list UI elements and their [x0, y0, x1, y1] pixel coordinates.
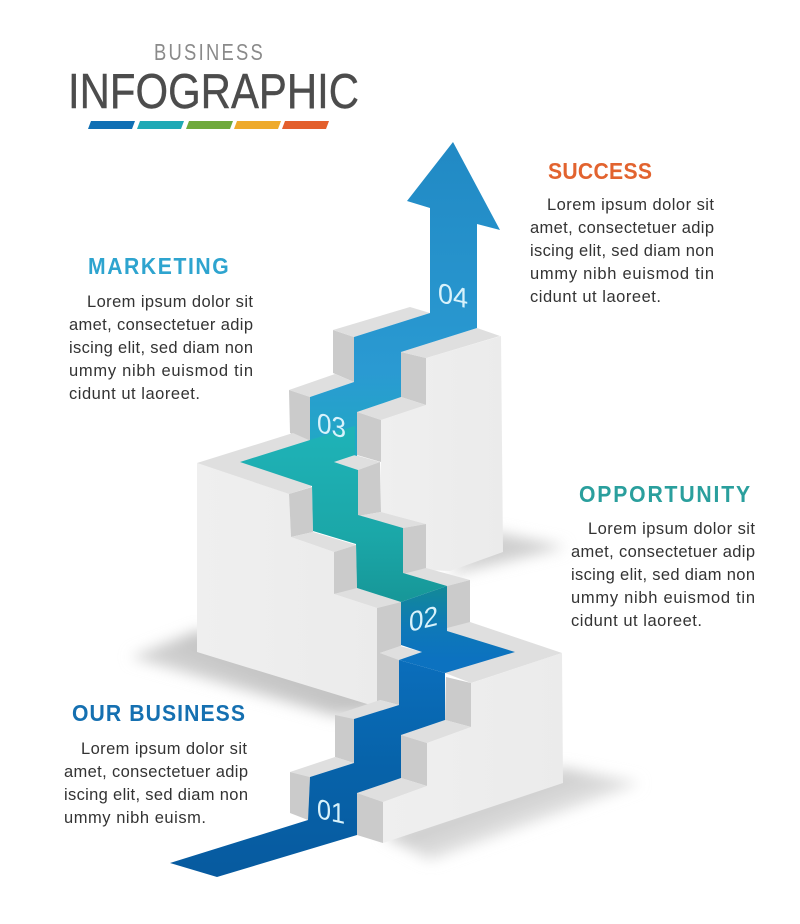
body: marketing — [69, 293, 253, 403]
body: opportunity: amet, consectetuer adip — [571, 543, 755, 561]
path segment 02 — [399, 586, 515, 673]
text block: success — [530, 158, 714, 306]
step number 01: 01 — [317, 792, 345, 830]
heading: opportunity: OPPORTUNITY — [579, 481, 750, 507]
body: marketing: amet, consectetuer adip — [69, 316, 253, 334]
step number 03: 03 — [317, 406, 346, 444]
path segment 04 and arrowhead — [310, 142, 500, 456]
path segment 03 teal — [240, 426, 447, 602]
staircase shadows — [130, 532, 640, 860]
upper right block — [289, 307, 503, 633]
heading: marketing: MARKETING — [88, 253, 229, 279]
body: our business: iscing elit, sed diam non — [64, 786, 248, 804]
body: opportunity: Lorem ipsum dolor sit — [588, 520, 755, 538]
lower right block — [357, 622, 563, 843]
path segment 01 — [170, 660, 445, 877]
title — [68, 40, 359, 129]
heading: success: SUCCESS — [548, 158, 652, 184]
title: business: BUSINESS — [154, 40, 263, 66]
heading: our business: OUR BUSINESS — [72, 700, 245, 726]
body: opportunity — [571, 520, 755, 630]
body: success: Lorem ipsum dolor sit — [547, 196, 714, 214]
text block: our business — [64, 700, 248, 827]
body: our business: ummy nibh euism. — [64, 809, 206, 827]
body: marketing: iscing elit, sed diam non — [69, 339, 253, 357]
body: success: ummy nibh euismod tin — [530, 265, 714, 283]
body: success — [530, 196, 714, 306]
body: our business: Lorem ipsum dolor sit — [81, 740, 247, 758]
body: marketing: Lorem ipsum dolor sit — [87, 293, 253, 311]
title: infographic: INFOGRAPHIC — [68, 65, 359, 119]
arrow path — [170, 142, 515, 877]
text block: opportunity — [571, 481, 755, 630]
body: success: cidunt ut laoreet. — [530, 288, 661, 306]
step number 04: 04 — [438, 276, 468, 314]
body: opportunity: ummy nibh euismod tin — [571, 589, 755, 607]
body: opportunity: iscing elit, sed diam non — [571, 566, 755, 584]
lower back steps — [290, 646, 422, 820]
body: our business — [64, 740, 248, 827]
body: opportunity: cidunt ut laoreet. — [571, 612, 702, 630]
body: marketing: ummy nibh euismod tin — [69, 362, 253, 380]
body: success: iscing elit, sed diam non — [530, 242, 714, 260]
title colour bars — [88, 121, 329, 129]
step number 02: 02 — [409, 600, 438, 639]
text block: marketing — [69, 253, 253, 403]
body: our business: amet, consectetuer adip — [64, 763, 248, 781]
big left block — [197, 433, 401, 707]
body: marketing: cidunt ut laoreet. — [69, 385, 200, 403]
body: success: amet, consectetuer adip — [530, 219, 714, 237]
